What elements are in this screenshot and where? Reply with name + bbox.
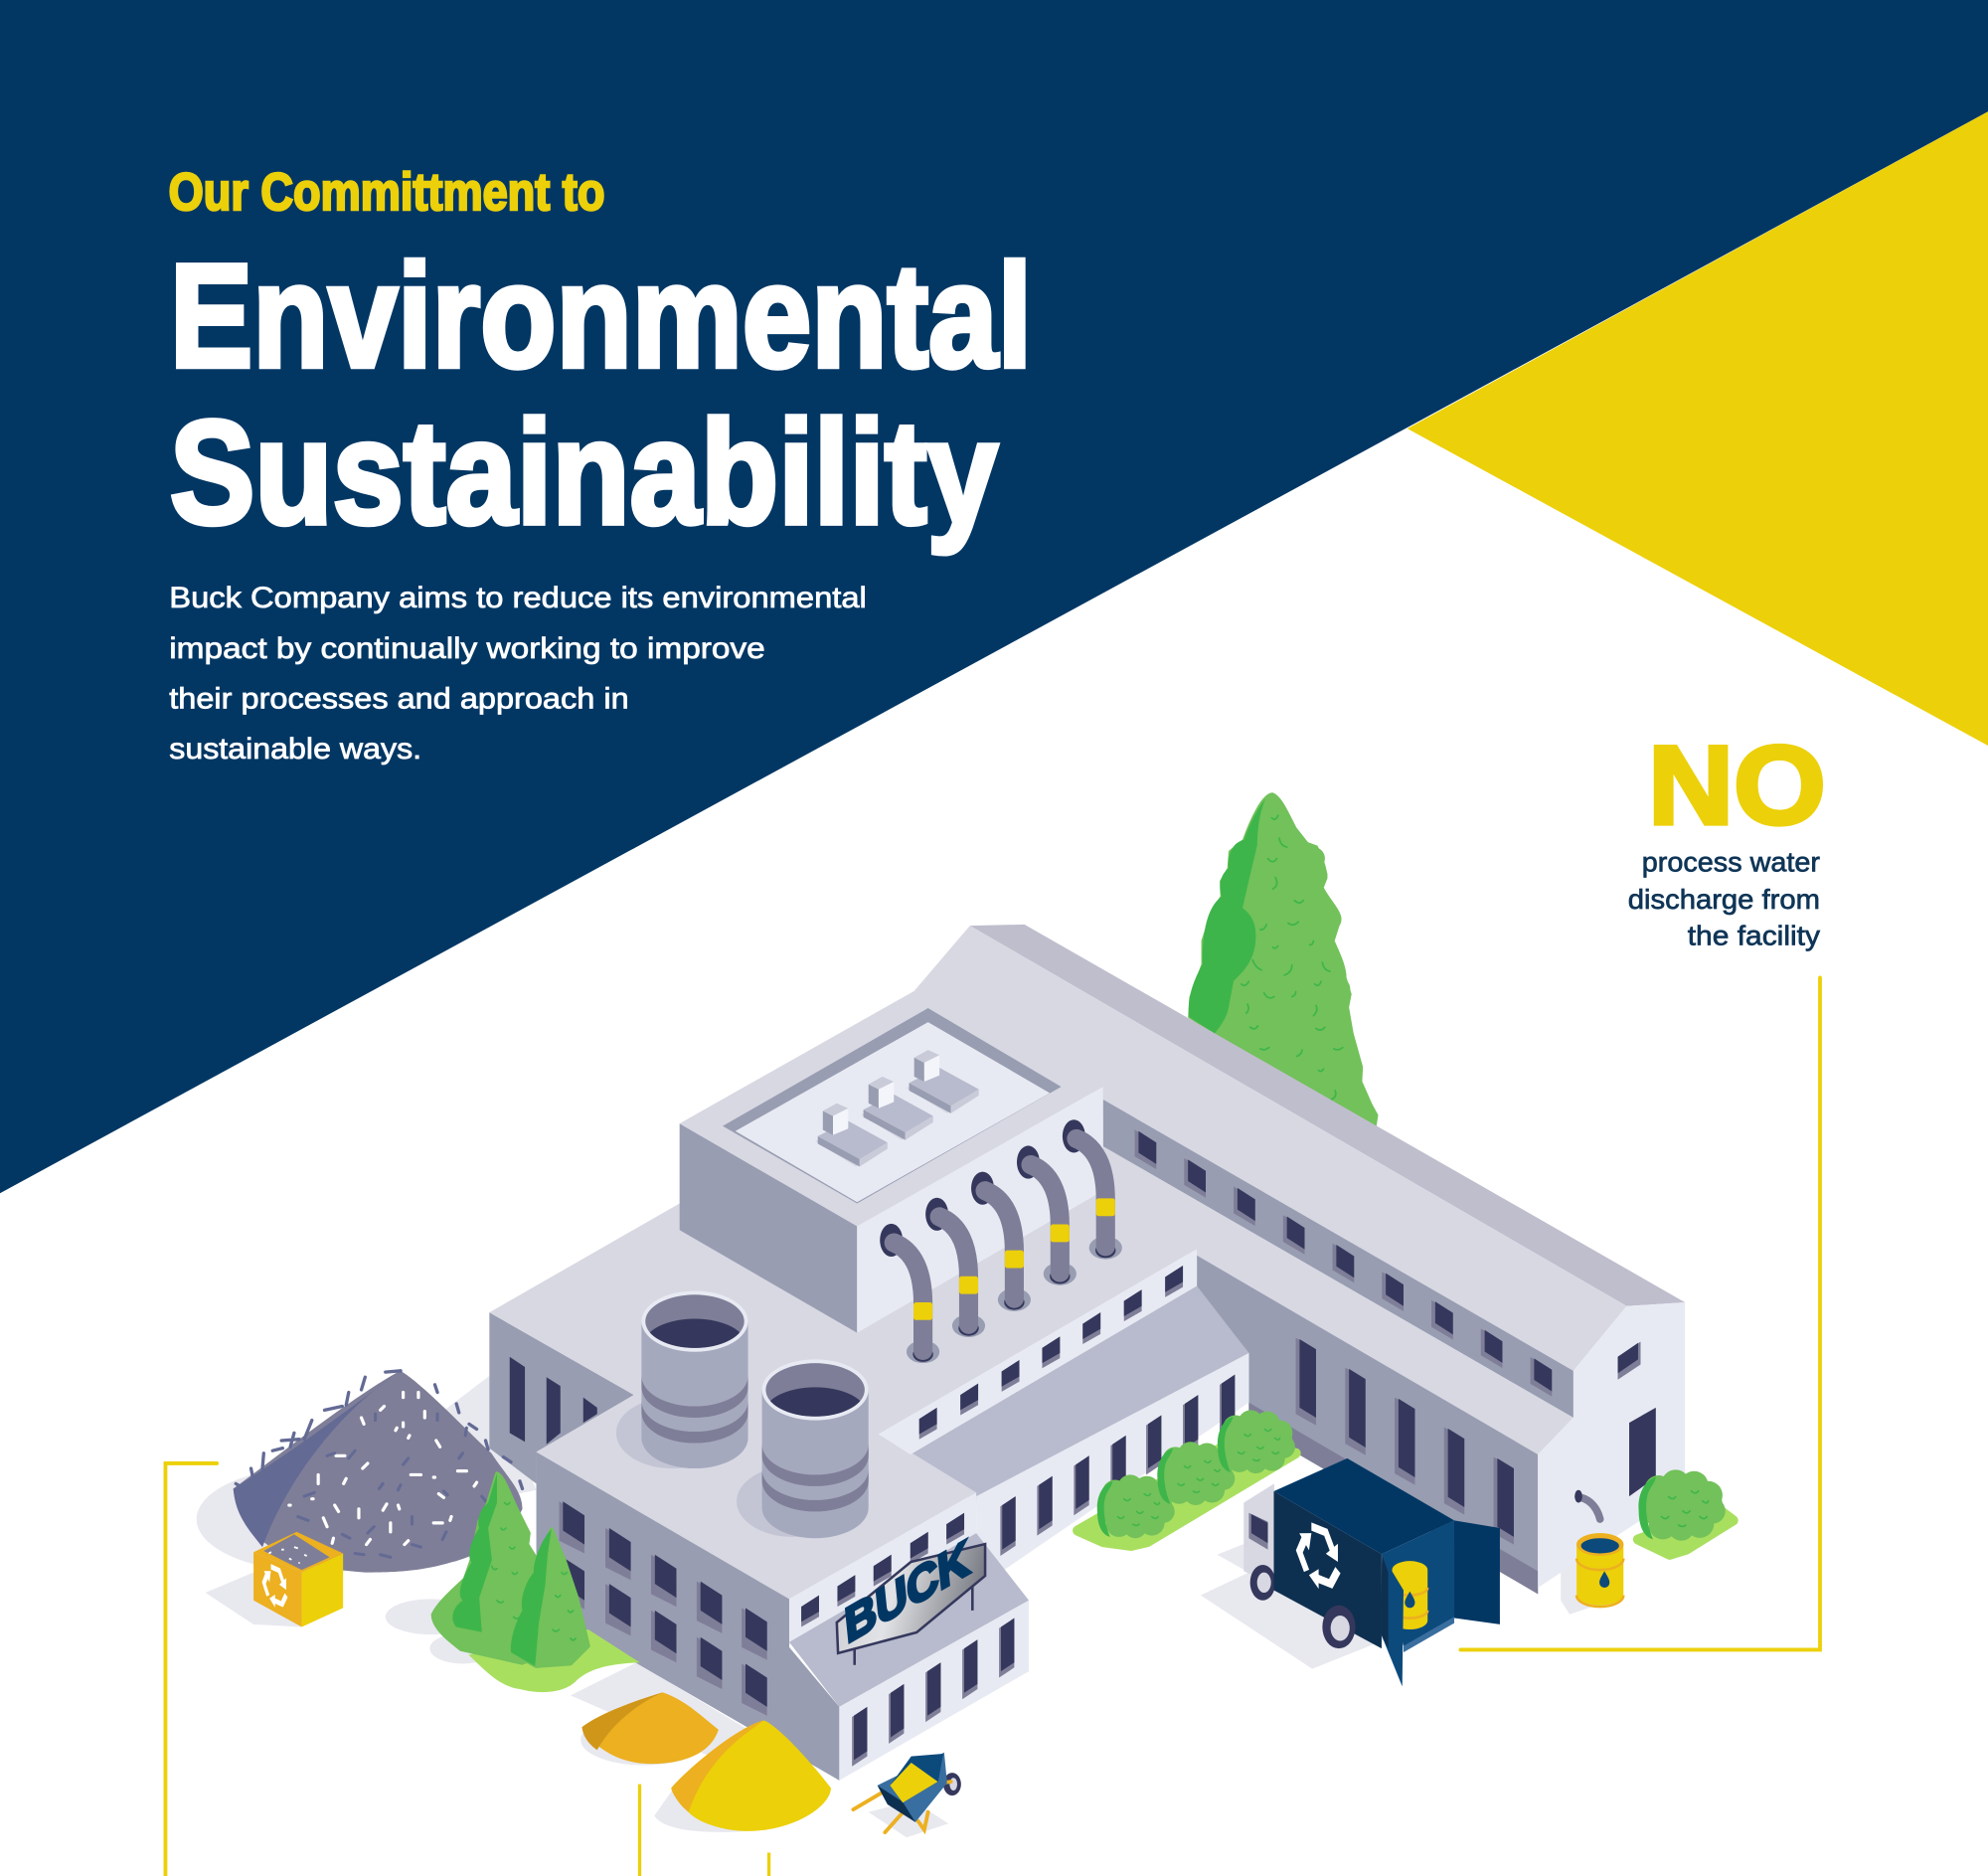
main lower roof [489,1115,1197,1599]
callout text: the facility [1688,920,1820,950]
pile edge spikes [236,1371,523,1490]
side wing front wall [976,1353,1248,1585]
leader line: left [165,1463,217,1876]
left end windows [510,1357,597,1445]
truck side [1274,1491,1382,1648]
bin gravel load [263,1534,330,1570]
penthouse right wall [857,1087,1103,1333]
intro paragraph: their processes and approach in [169,682,629,715]
small strip windows [919,1266,1183,1440]
callout number word: NO [1648,722,1826,847]
tree B [511,1529,588,1666]
silo 1 [616,1290,748,1468]
side wing roof [911,1285,1248,1504]
shrubs [1097,1474,1175,1538]
barrow load [890,1763,937,1802]
truck wheel front [1322,1606,1356,1648]
yellow recycling bin [253,1532,343,1626]
intro paragraph: sustainable ways. [169,733,421,766]
yellow corner triangle [1408,111,1988,746]
penthouse roof recess [723,1008,1062,1203]
intro paragraph: Buck Company aims to reduce its environmental [169,582,867,614]
penthouse roof [680,991,1103,1226]
eyebrow heading: Our Committment to [169,163,604,222]
oil barrel [1576,1533,1623,1607]
gable door [1629,1408,1656,1496]
entrance front wall [839,1601,1029,1781]
truck top [1274,1458,1454,1554]
front block left wall [537,1451,839,1781]
wall pipe by barrel [1574,1490,1600,1519]
clerestory strip [1103,1100,1574,1418]
handles and legs [853,1782,951,1832]
side wing windows [1000,1375,1235,1556]
gable end wall [1538,1302,1685,1588]
pile shaded side [234,1371,401,1547]
leader line: centre left [638,1785,641,1876]
callout: no process water discharge [1460,722,1826,1649]
barrow body [878,1753,947,1822]
icon: recycling on truck [1299,1522,1338,1597]
front block windows [559,1501,767,1716]
pile white flecks [289,1393,477,1545]
intro paragraph [169,582,867,766]
ground shadows [197,1376,1600,1837]
tree crown bumps [1302,847,1376,1123]
exhaust pipes [880,1119,1122,1363]
entrance windows [852,1619,1014,1767]
gable window [1618,1341,1641,1380]
tree leaf ticks [1242,815,1343,1100]
callout leader line [1460,977,1820,1649]
orange sand pile [581,1692,719,1764]
lower long roof [1103,1146,1574,1454]
front strip windows [801,1513,964,1626]
wheelbarrow [853,1753,961,1832]
tree leaf ticks [492,1502,576,1640]
dark grass [431,1543,588,1665]
truck interior [1382,1520,1454,1646]
main title [170,235,1032,555]
long wing roof ridge [970,925,1685,1306]
barrel in truck [1393,1561,1427,1629]
left end wall [489,1312,634,1483]
right shrub and grass [1638,1469,1734,1555]
entrance canopy roof [789,1533,1029,1707]
intro paragraph: impact by continually working to improve [169,632,765,665]
rooftop vents [815,1050,979,1166]
clerestory windows [1135,1129,1552,1397]
long wing side wall [1197,1256,1538,1594]
long wing roof [914,926,1626,1371]
big tree behind building [1189,793,1377,1135]
light grass [468,1629,640,1692]
wheel [943,1773,961,1795]
penthouse left wall [680,1123,857,1333]
callout text [1628,846,1820,950]
callout text: discharge from [1628,884,1820,915]
yellow sand pile [671,1720,831,1831]
small window strip [879,1249,1197,1454]
BUCK sign: BUCK [843,1530,971,1654]
grass patch with shrubs [1077,1410,1296,1546]
truck open doors [1454,1520,1500,1624]
front trees group [431,1473,640,1692]
truck wheel rear [1250,1565,1275,1601]
long wing wall base [1248,1403,1538,1594]
callout text: process water [1642,846,1820,877]
recycling truck [1243,1458,1500,1686]
front block window strip [789,1492,976,1644]
long wing tall windows [1296,1338,1514,1545]
icon: recycling on bin [263,1564,286,1613]
truck cab [1243,1483,1274,1585]
tree A [451,1473,538,1661]
pile dark flecks [280,1414,489,1557]
tree shaded side [1189,799,1265,1034]
factory building [489,925,1685,1781]
main title: Sustainability [170,391,998,555]
leader line: centre right [767,1853,770,1876]
gravel pile [234,1371,523,1573]
silo 2 [737,1359,869,1538]
main title: Environmental [170,235,1032,399]
navy diagonal header panel [0,0,1988,1193]
